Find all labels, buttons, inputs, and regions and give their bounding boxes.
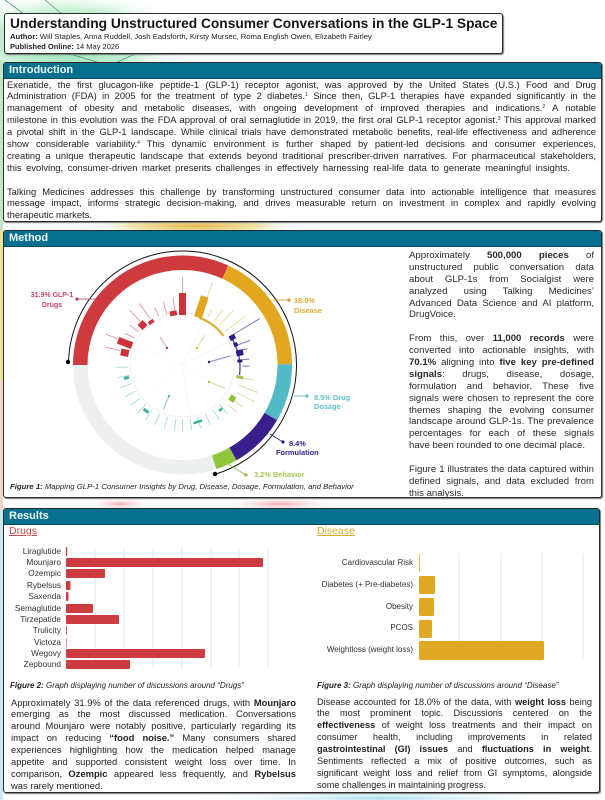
title block	[4, 13, 503, 54]
method text: Figure 1 illustrates the data captured within	[409, 464, 594, 475]
bar chart: drugs: Zepbound	[24, 659, 61, 669]
introduction text: message impact, informs strategic decision-making, and drives measurable return on investment in complex and rapidly evolving	[7, 197, 596, 208]
heading: results	[4, 509, 599, 525]
behavior bars	[228, 375, 258, 412]
text: drugs findings	[11, 696, 296, 791]
method text: unstructured public conversation data	[409, 262, 594, 273]
caption: figure 1: Figure 1: Mapping GLP-1 Consumer Insights by Drug, Disease, Dosage, Formulation, and Behavior	[10, 482, 354, 491]
bar chart: drugs: Mounjaro	[26, 557, 61, 567]
authors: Author: Will Staples, Anna Ruddell, Josh Eadsforth, Kirsty Mursec, Roma English Owen, Elizabeth Fairley	[10, 32, 372, 41]
bar chart: drugs: Trulicity	[33, 625, 61, 635]
method text: signals: drugs, disease, dosage,	[409, 369, 594, 380]
introduction text: management of obesity and metabolic diseases, with ongoing development of improved therapies and indications.2 A notable	[7, 102, 596, 113]
method text: landscape around GLP-1s. The prevalence	[409, 416, 594, 427]
heading: method: Method	[9, 232, 48, 244]
introduction text: creating a unique therapeutic landscape that extends beyond traditional prescriber-driven narratives. For pharmaceutical stakeholders,	[7, 150, 596, 161]
disease labels: Cardiovascular Risk	[342, 558, 413, 567]
method text	[409, 250, 594, 499]
text: drugs findings: was rarely mentioned.	[11, 780, 103, 791]
callout: disease 18.0%	[273, 296, 322, 315]
bar chart: disease: Obesity	[386, 602, 413, 611]
heading: results: Results	[9, 510, 49, 522]
method text: defined signals, and data excluded from	[409, 476, 594, 487]
bar chart: drugs: Saxenda	[28, 591, 61, 601]
method text: DrugVoice.	[409, 309, 456, 320]
callout: disease 18.0%: 18.0%	[294, 296, 315, 305]
text: disease findings	[317, 696, 592, 790]
introduction text: therapeutic markets.	[7, 209, 92, 220]
method text: From this, over 11,000 records were	[409, 333, 594, 344]
chart: GLP-1 consumer insights radial diagram	[30, 250, 351, 479]
callout: disease 18.0%: Disease	[294, 306, 322, 315]
callout: drugs 31.9%	[31, 292, 97, 309]
text: disease findings: significant weight loss and relief from GI symptoms, alongside	[317, 768, 592, 778]
text: drugs findings: emerging as the most discussed medication. Conversations	[11, 708, 296, 719]
introduction text: this evolving, consumer-driven market presents challenges in effectively harnessing real-life data to generate meaningful insights.	[7, 162, 570, 173]
text: disease findings: consumer health, including improvements in related	[317, 732, 592, 742]
bar chart: disease: PCOS	[390, 623, 413, 632]
bar chart: drugs: Victoza	[34, 637, 61, 647]
method text: this analysis.	[409, 488, 464, 499]
callout: formulation 8.4%	[270, 434, 319, 457]
central spokes	[160, 335, 230, 410]
text: disease findings: the most prominent topic. Discussions centered on the	[317, 708, 592, 718]
bar chart: drugs: Wegovy	[31, 648, 61, 658]
bar chart: drugs: Ozempic	[28, 568, 61, 578]
method text: Advanced Data Science and AI platform,	[409, 298, 594, 309]
text: drugs findings: appetite and supported consistent weight loss over time. In	[11, 756, 296, 767]
method text: about GLP-1s from Socialgist were	[409, 274, 594, 285]
callout: formulation 8.4%: 8.4%	[289, 439, 306, 448]
method text: have been rounded to one decimal place.	[409, 440, 585, 451]
bar chart: drugs: Semaglutide	[15, 603, 61, 613]
introduction text	[7, 78, 596, 220]
outer ring segments	[43, 225, 322, 505]
panel: results	[3, 508, 600, 793]
title: Understanding Unstructured Consumer Conversations in the GLP-1 Space	[10, 16, 497, 31]
callout: drugs 31.9%: Drugs	[42, 302, 62, 309]
introduction text: show considerable variability.4 This dynamic environment is further shaped by patient-led decisions and consumer experiences,	[7, 138, 596, 149]
drug labels: Liraglutide	[23, 546, 61, 556]
text: drugs findings: around Mounjaro were notably positive, particularly regarding its	[11, 720, 296, 731]
method text: analyzed using Talking Medicines’	[409, 286, 594, 297]
introduction text: a pivotal shift in the GLP-1 landscape. While clinical trials have demonstrated metabolic benefits, real-life effectiveness and adherence	[7, 126, 596, 137]
subheading: disease: Disease	[317, 525, 355, 537]
text: disease findings: Disease accounted for 18.0% of the data, with weight loss being	[317, 696, 592, 706]
method text: signals were chosen to represent the core	[409, 393, 594, 404]
method text: percentages for each of these signals	[409, 428, 594, 439]
method text: 70.1% aligning into five key pre-defined	[409, 357, 594, 368]
callout: formulation 8.4%: Formulation	[276, 448, 319, 457]
method text: themes shaping the evolving consumer	[409, 405, 594, 416]
introduction text: Talking Medicines addresses this challenge by transforming unstructured consumer data into actionable intelligence that measures	[7, 186, 596, 197]
text: drugs findings: experiences highlighting how the medication helped manage	[11, 744, 296, 755]
caption: figure 2: Figure 2: Graph displaying number of discussions around “Drugs”	[10, 681, 244, 690]
heading: introduction	[4, 63, 601, 79]
caption: figure 3: Figure 3: Graph displaying number of discussions around “Disease”	[317, 681, 558, 690]
formulation bars	[229, 319, 260, 375]
bar chart: drugs: Rybelsus	[27, 580, 61, 590]
text: disease findings: gastrointestinal (GI) issues and fluctuations in weight.	[317, 744, 592, 754]
callout: drug dosage 8.5%	[292, 393, 351, 411]
text: disease findings: Sentiments reflected a mix of positive outcomes, such as	[317, 756, 592, 766]
disease bars	[194, 282, 246, 336]
bar chart: disease: Diabetes (+ Pre-diabetes)	[322, 580, 413, 589]
callout: drug dosage 8.5%: 8.5% Drug	[314, 393, 351, 402]
bar chart: disease: Weightloss (weight loss)	[327, 645, 413, 654]
heading: method	[4, 231, 601, 247]
text: disease findings: some challenges in maintaining progress.	[317, 780, 486, 790]
dosage bars	[117, 367, 228, 431]
text: drugs findings: impact on reducing “food noise.” Many consumers shared	[11, 732, 296, 743]
bar chart: disease	[322, 553, 584, 660]
subheading: drugs: Drugs	[9, 525, 37, 537]
black outer arc with end dots	[66, 248, 299, 482]
drug bars	[106, 277, 186, 357]
method text: Approximately 500,000 pieces of	[409, 250, 594, 261]
method text: formulation and behavior. These five	[409, 381, 594, 392]
text: drugs findings: comparison, Ozempic appeared less frequently, and Rybelsus	[11, 768, 296, 779]
heading: introduction: Introduction	[9, 64, 73, 76]
bar chart: drugs: Tirzepatide	[20, 614, 61, 624]
introduction text: Administration (FDA) in 2005 for the treatment of type 2 diabetes.1 Since then, GLP-1 therapies have expanded significantly in the	[7, 90, 596, 101]
method text: converted into actionable insights, with	[409, 345, 594, 356]
text: drugs findings: Approximately 31.9% of the data referenced drugs, with Mounjaro	[11, 696, 296, 708]
panel: introduction	[3, 62, 602, 222]
introduction text: Exenatide, the first glucagon-like peptide-1 (GLP-1) receptor agonist, was approved by the United States (U.S.) Food and Drug	[7, 78, 596, 90]
text: disease findings: effectiveness of weight loss treatments and their impact on	[317, 720, 592, 730]
callout: behavior 3.2%	[228, 464, 305, 479]
callout: behavior 3.2%: 3.2% Behavior	[254, 470, 305, 479]
introduction text: milestone in this evolution was the FDA approval of oral semaglutide in 2019, the first oral GLP-1 receptor agonist.3 This approval marked	[7, 114, 596, 125]
panel: method	[3, 230, 602, 498]
callout: drugs 31.9%: 31.9% GLP-1	[31, 292, 73, 299]
publication date: Published Online: 14 May 2026	[10, 42, 119, 51]
bar chart: drugs	[15, 546, 268, 669]
callout: drug dosage 8.5%: Dosage	[314, 402, 341, 411]
